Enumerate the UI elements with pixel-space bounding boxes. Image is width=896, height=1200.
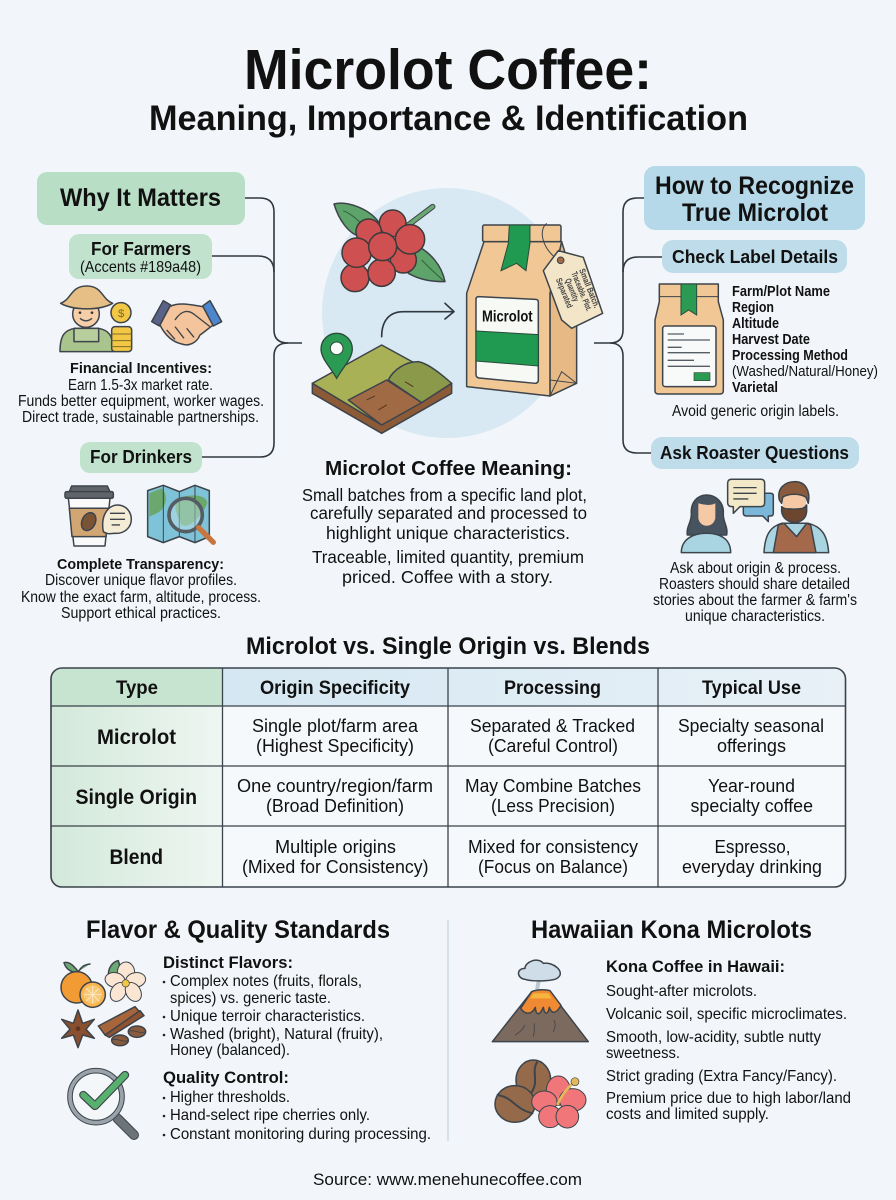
title: Microlot Coffee: <box>244 38 652 102</box>
panel: center illustration <box>302 188 603 587</box>
icon: coffee cup with speech bubble <box>65 486 131 546</box>
text: label details list: (Washed/Natural/Honey) <box>732 364 878 380</box>
icon: map with magnifier <box>148 485 213 543</box>
icon: microlot coffee bag <box>467 225 577 396</box>
row: microlot: offerings <box>717 735 786 756</box>
table header row: Processing <box>504 678 601 699</box>
background circle <box>322 188 572 438</box>
text: quality control: Quality Control: <box>163 1068 289 1087</box>
text: distinct flavors: spices) vs. generic taste. <box>170 990 331 1007</box>
icon: farmer with coins: $ <box>118 308 125 320</box>
icon: coffee cherries <box>334 203 445 292</box>
row: microlot: Microlot <box>97 726 176 749</box>
row: single origin: Year-round <box>708 775 795 796</box>
row: microlot: Separated & Tracked <box>470 715 635 736</box>
text: kona coffee: costs and limited supply. <box>606 1106 769 1123</box>
icon: hang tag: Small Batch. <box>577 267 602 309</box>
text: complete transparency <box>21 556 261 622</box>
row: blend: (Mixed for Consistency) <box>242 856 428 877</box>
heading: for drinkers: For Drinkers <box>90 446 192 467</box>
icon: bag with label <box>655 284 723 394</box>
text: financial incentives: Funds better equipment, worker wages. <box>18 393 264 410</box>
heading: for drinkers <box>80 442 202 473</box>
text: label details list: Farm/Plot Name <box>732 284 830 300</box>
arrow: plot to bag <box>382 303 454 337</box>
icon: customer and roaster conversation <box>681 479 829 553</box>
row: single origin: (Broad Definition) <box>266 795 404 816</box>
heading: how to recognize: How to Recognize <box>655 172 854 200</box>
row: microlot: Specialty seasonal <box>678 715 824 736</box>
table header row: Typical Use <box>702 678 801 699</box>
icon: hang tag: Separated <box>554 276 575 309</box>
row: blend: Blend <box>110 846 163 869</box>
icon: microlot coffee bag: Microlot <box>482 309 533 326</box>
text: microlot coffee meaning: Microlot Coffee Meaning: <box>325 458 572 480</box>
text: kona coffee: Volcanic soil, specific microclimates. <box>606 1006 847 1023</box>
text: microlot coffee meaning: carefully separated and processed to <box>310 503 587 523</box>
row: microlot <box>97 715 824 756</box>
heading: how to recognize: True Microlot <box>682 199 829 227</box>
panel: flavor and quality standards <box>61 916 431 1143</box>
row: single origin <box>76 775 813 816</box>
text: financial incentives <box>18 360 264 426</box>
text: quality control <box>163 1068 431 1143</box>
heading: why it matters <box>37 172 245 225</box>
heading: hawaiian kona: Hawaiian Kona Microlots <box>531 916 812 944</box>
panel: hawaiian kona microlots <box>492 916 851 1128</box>
text: microlot coffee meaning: Small batches from a specific land plot, <box>302 485 587 505</box>
text: ask about origin: stories about the farmer & farm's <box>653 592 857 609</box>
text: distinct flavors: Washed (bright), Natural (fruity), <box>170 1026 383 1043</box>
text: kona coffee: Kona Coffee in Hawaii: <box>606 957 785 976</box>
icon: handshake <box>152 301 222 345</box>
text: complete transparency: Support ethical practices. <box>61 605 221 622</box>
text: kona coffee: Sought-after microlots. <box>606 983 757 1000</box>
row: single origin: specialty coffee <box>690 795 813 816</box>
text: ask about origin: unique characteristics. <box>685 608 825 625</box>
row: microlot: (Careful Control) <box>488 735 618 756</box>
text: label details list: Harvest Date <box>732 332 810 348</box>
row: blend: (Focus on Balance) <box>478 856 628 877</box>
text: ask about origin <box>653 560 857 625</box>
text: label details list: Processing Method <box>732 348 848 364</box>
text: complete transparency: Know the exact farm, altitude, process. <box>21 589 261 606</box>
heading: why it matters: Why It Matters <box>60 184 221 212</box>
text: label details list <box>732 284 878 396</box>
text: kona coffee: Strict grading (Extra Fancy/Fancy). <box>606 1068 837 1085</box>
text: ask about origin: Ask about origin & process. <box>670 560 841 577</box>
text: financial incentives: Earn 1.5-3x market rate. <box>68 377 213 394</box>
heading: how to recognize <box>644 166 865 230</box>
heading: check label details <box>662 240 847 273</box>
table header row: Type <box>116 678 158 699</box>
icon: hang tag: Quantity <box>563 277 581 303</box>
row: single origin: (Less Precision) <box>491 795 615 816</box>
heading: ask roaster questions: Ask Roaster Questions <box>660 442 849 463</box>
text: quality control: Higher thresholds. <box>170 1089 290 1106</box>
text: financial incentives: Direct trade, sustainable partnerships. <box>22 409 259 426</box>
comparison table <box>51 668 846 887</box>
title <box>149 38 748 138</box>
text: quality control: Hand-select ripe cherries only. <box>170 1107 370 1124</box>
text: distinct flavors: Complex notes (fruits, florals, <box>170 973 362 990</box>
icon: star anise, cinnamon and beans <box>62 1007 146 1048</box>
text: ask about origin: Roasters should share detailed <box>659 576 850 593</box>
row: blend: everyday drinking <box>682 856 822 877</box>
text: quality control: Constant monitoring during processing. <box>170 1126 431 1143</box>
icon: magnifier with check <box>70 1071 134 1135</box>
row: single origin: May Combine Batches <box>465 775 641 796</box>
text: complete transparency: Discover unique flavor profiles. <box>45 572 237 589</box>
row: single origin: One country/region/farm <box>237 775 433 796</box>
heading: ask roaster questions <box>651 437 859 469</box>
text: distinct flavors <box>163 953 383 1059</box>
text: kona coffee: Premium price due to high labor/land <box>606 1090 851 1107</box>
text: label details list: Altitude <box>732 316 779 332</box>
text: distinct flavors: Distinct Flavors: <box>163 953 293 972</box>
row: blend: Mixed for consistency <box>468 836 639 857</box>
icon: volcano <box>492 960 588 1042</box>
table grid <box>51 668 846 887</box>
icon: land plot with location pin <box>312 333 452 433</box>
icon: hang tag: Traceable. Plot. <box>569 270 594 312</box>
row: single origin: Single Origin <box>76 786 197 809</box>
heading: for farmers: (Accents #189a48) <box>80 259 201 276</box>
source: Source: www.menehunecoffee.com <box>313 1170 582 1189</box>
text: financial incentives: Financial Incentives: <box>70 360 212 377</box>
row: blend: Espresso, <box>714 836 790 857</box>
connector: left bracket <box>202 198 302 457</box>
panel: how to recognize <box>644 166 878 625</box>
text: microlot coffee meaning: Traceable, limited quantity, premium <box>312 547 584 567</box>
heading: for farmers: For Farmers <box>91 238 191 259</box>
icon: orange and flower <box>61 961 147 1007</box>
table backgrounds <box>51 668 846 887</box>
heading: comparison table: Microlot vs. Single Origin vs. Blends <box>246 633 650 660</box>
table header row: Origin Specificity <box>260 678 410 699</box>
row: blend <box>110 836 822 877</box>
text: distinct flavors: Unique terroir characteristics. <box>170 1008 365 1025</box>
panel: why it matters <box>18 172 264 622</box>
connector: right bracket <box>594 198 662 453</box>
text: distinct flavors: Honey (balanced). <box>170 1042 290 1059</box>
heading: flavor and quality: Flavor & Quality Standards <box>86 916 390 944</box>
text: microlot coffee meaning <box>302 458 587 587</box>
heading: for farmers <box>69 234 212 279</box>
text: label details list: Varietal <box>732 380 778 396</box>
text: complete transparency: Complete Transparency: <box>57 556 224 573</box>
icon: farmer with coins <box>60 286 132 352</box>
text: microlot coffee meaning: highlight unique characteristics. <box>326 523 570 543</box>
table header row <box>116 678 801 699</box>
title: Meaning, Importance & Identification <box>149 99 748 138</box>
row: microlot: (Highest Specificity) <box>256 735 414 756</box>
text: kona coffee: Smooth, low-acidity, subtle nutty <box>606 1029 821 1046</box>
heading: check label details: Check Label Details <box>672 246 838 267</box>
text: kona coffee: sweetness. <box>606 1045 680 1062</box>
row: microlot: Single plot/farm area <box>252 715 419 736</box>
text: label details list: Region <box>732 300 774 316</box>
row: blend: Multiple origins <box>275 836 396 857</box>
text: kona coffee <box>606 957 851 1123</box>
icon: hang tag <box>542 223 603 328</box>
icon: coffee beans and hibiscus <box>495 1060 586 1128</box>
text: avoid generic labels: Avoid generic origin labels. <box>672 403 839 420</box>
text: microlot coffee meaning: priced. Coffee with a story. <box>342 567 553 587</box>
